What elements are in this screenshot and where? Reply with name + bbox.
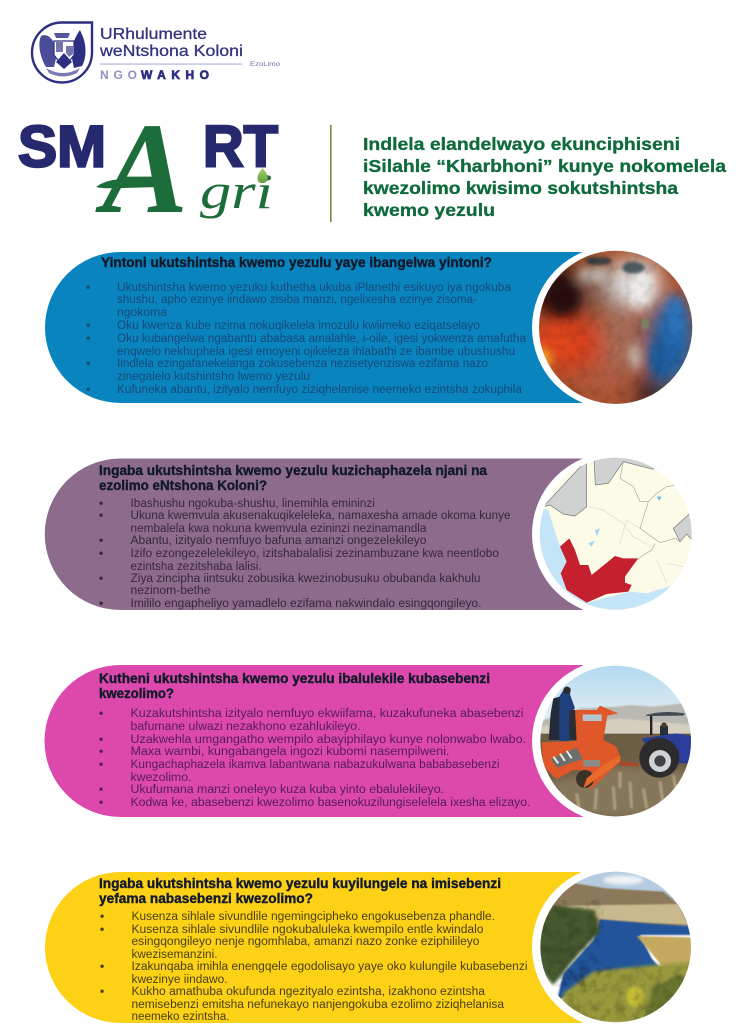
bullet list: Imililo engapheliyo yamadlelo ezifama nakwindalo esingqongileyo. [130,598,482,610]
bullet list [99,706,530,809]
title [363,134,726,220]
bullet list: zinegalelo kutshintsho lwemo yezulu [117,371,310,383]
panel: will it be good for farm work [45,866,697,1024]
bullet list: • [100,909,104,923]
logo: Smart Agri [18,97,278,241]
bullet list: Oku kubangelwa ngabantu ababasa amalahle, i-oile, igesi yokwenza amafutha [117,333,527,345]
logo: Western Cape Government [32,22,280,82]
bullet list: Kufuneka abantu, izityalo nemfuyo ziziqhelanise neemeko ezintsha zokuphila [117,384,523,396]
text: NGO WAKHO: WAKHO [141,68,209,82]
bullet list [100,909,528,1023]
bullet list: kwezolimo. [130,772,192,784]
bullet list: bafumane ulwazi nezakhono ezahlukileyo. [130,721,360,733]
title: iSilahle “Kharbhoni” kunye nokomelela [363,156,726,176]
bullet list: Kodwa ke, abasebenzi kwezolimo basenokuzilungiselelela ixesha elizayo. [130,797,530,809]
icon: leaf [258,168,268,183]
bullet list: • [100,984,104,998]
bullet list: shushu, apho ezinye iindawo zisiba manzi, ngelixesha ezinye zisoma- [117,294,477,306]
logo: Smart Agri: gri [200,163,273,219]
bullet list: • [99,496,103,510]
planter machine [542,706,621,788]
logo: Smart Agri: RT [203,114,278,180]
text: NGO WAKHO [100,68,209,82]
bullet list: ezintsha zezitshaba lalisi. [130,561,262,573]
bullet list: Ukuna kwemvula akusenakuqikeleleka, namaxesha amade okoma kunye [130,510,510,522]
bullet list: • [99,546,103,560]
icon: coat of arms shield [32,22,92,82]
heading: Ingaba ukutshintsha kwemo yezulu kuzichaphazela njani na [99,463,487,478]
title: kwemo yezulu [363,200,495,220]
text: NGO WAKHO: NGO [100,68,137,82]
heading: Yintoni ukutshintsha kwemo yezulu yaye ibangelwa yintoni? [101,255,492,270]
bullet list: Izakunqaba imihla enengqele egodolisayo yaye oko kulungile kubasebenzi [132,961,528,973]
photo: farm workers with tractor and planter [537,665,697,820]
image: half burning half blue planet [539,250,692,404]
bullet list: Ziya zincipha iintsuku zobusika kwezinobusuku obubanda kakhulu [130,573,480,585]
bullet list: • [99,533,103,547]
bullet list: • [86,280,90,294]
heading: Kutheni ukutshintsha kwemo yezulu ibalulekile kubasebenzi [99,671,490,686]
bullet list: • [99,744,103,758]
bullet list: nembalela kwa nokuna kwemvula ezininzi nezinamandla [130,523,427,535]
bullet list: • [86,382,90,396]
bullet list: nemisebenzi emitsha nefunekayo nanjengokuba ezolimo ziziqhelanisa [132,999,505,1011]
bullet list: esingqongileyo nenje ngomhlaba, amanzi nazo zonke eziphilileyo [132,936,480,948]
panel: effects on Western Cape agriculture [45,453,697,615]
bullet list: Ibashushu ngokuba-shushu, linemihla emininzi [130,498,375,510]
heading: Ingaba ukutshintsha kwemo yezulu kuyilungele na imisebenzi [99,876,501,891]
bullet list [99,496,510,610]
text: EzoLimo: EzoLimo [250,61,280,68]
bullet list: nezinom-bethe [130,585,210,597]
bullet list: Kusenza sihlale sivundlile ngokubaluleka kwempilo entle kwindalo [132,924,484,936]
title: Indlela elandelwayo ekunciphiseni [363,134,680,154]
bullet list: • [99,732,103,746]
text: government name: weNtshona Koloni [99,43,243,60]
bullet list: • [99,508,103,522]
bullet list: • [100,922,104,936]
title: kwezolimo kwisimo sokutshintsha [363,178,678,198]
text: government name: URhulumente [100,26,207,43]
heading [99,463,487,493]
panel: what is climate change [45,246,697,409]
tractor [650,715,652,735]
text: government name [99,26,243,60]
heading [99,876,501,906]
bullet list: • [99,795,103,809]
bullet list: • [86,318,90,332]
bullet list: Oku kwenza kube nzima nokuqikelela imozulu kwiimeko eziqatselayo [117,320,480,332]
bullet list: Ukufumana manzi oneleyo kuza kuba yinto ebalulekileyo. [130,784,444,796]
logo: Smart Agri: SM [18,114,106,180]
bullet list: ngokoma [117,307,168,319]
bullet list: neemeko ezintsha. [132,1011,230,1023]
bullet list: Maxa wambi, kungabangela ingozi kubomi nasempilweni. [130,746,450,758]
bullet list: Kungachaphazela ikamva labantwana nabazukulwana bababasebenzi [130,759,500,771]
heading: yefama nabasebenzi kwezolimo? [99,891,313,906]
heading: kwezolimo? [99,686,174,701]
bullet list: Uzakwehla umgangatho wempilo abayiphilayo kunye nolonwabo lwabo. [130,734,526,746]
heading [99,671,490,701]
map: Western Cape highlighted in South Africa [533,453,697,610]
bullet list: • [99,596,103,610]
bullet list: kwezisemanzini. [132,949,218,961]
bullet list: kwezinye iindawo. [132,974,228,986]
bullet list: Kuzakutshintsha izityalo nemfuyo ekwiifama, kuzakufuneka abasebenzi [130,708,524,720]
bullet list: Kusenza sihlale sivundlile ngemingcipheko engokusebenza phandle. [132,911,495,923]
bullet list: • [100,959,104,973]
heading: ezolimo eNtshona Koloni? [99,478,267,493]
bullet list: • [99,782,103,796]
bullet list: • [86,356,90,370]
panel: why it matters to farm workers [45,660,697,822]
photo: river and wetland landscape [537,870,697,1024]
bullet list: • [99,706,103,720]
bullet list: • [99,757,103,771]
bullet list [86,280,527,396]
bullet list: Abantu, izityalo nemfuyo bafuna amanzi ongezelekileyo [130,535,426,547]
bullet list: Izifo ezongezelelekileyo, izitshabalalisi zezinambuzane kwa neentlobo [130,548,499,560]
worker [549,697,560,740]
bullet list: Ukutshintsha kwemo yezuku kuthetha ukuba iPlanethi esikuyo iya ngokuba [117,282,512,294]
bullet list: • [86,331,90,345]
bullet list: • [99,571,103,585]
logo: Smart Agri: A [95,97,188,241]
bullet list: Kukho amathuba okufunda ngezityalo ezintsha, izakhono ezintsha [132,986,486,998]
bullet list: Iindlela ezingafanekelanga zokusebenza nezisetyenziswa ezifama nazo [117,358,488,370]
bullet list: enqwelo nekhuphela igesi emoyeni ojikeleza ihlabathi ze ibambe ubushushu [117,346,515,358]
